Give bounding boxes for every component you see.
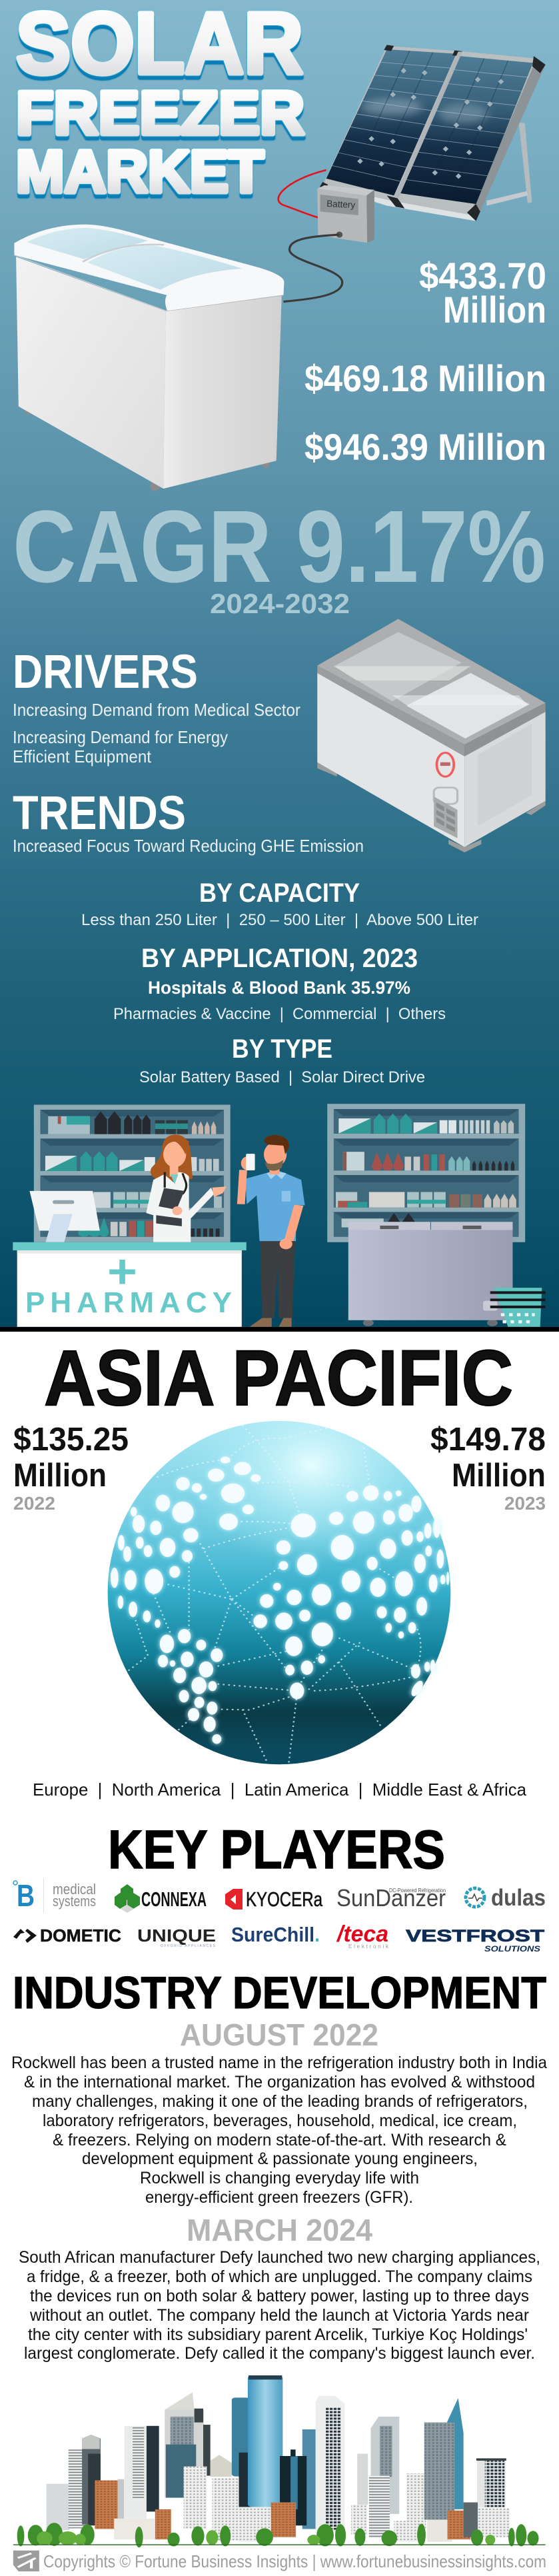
logo: B medical systems: B <box>17 1878 35 1913</box>
logo: SunDanzer: SunDanzer <box>336 1884 446 1912</box>
heading: by application: BY APPLICATION, 2023 <box>141 944 418 973</box>
stat: 2023 value <box>430 1422 546 1514</box>
logo: SureChill: SureChill. <box>231 1923 320 1946</box>
ground line <box>13 2544 546 2545</box>
logo: Connexa: CONNEXA <box>141 1888 207 1911</box>
logo: SunDanzer: DC-Powered Refrigeration <box>389 1888 446 1894</box>
date: August 2022: AUGUST 2022 <box>180 2017 378 2052</box>
drivers list <box>13 700 300 766</box>
trends text: Increased Focus Toward Reducing GHE Emission <box>13 836 364 856</box>
text block: March 2024 development: without an outlet. The company held the launch at Victoria Yards near <box>29 2306 529 2325</box>
text block: March 2024 development <box>19 2248 540 2363</box>
battery label: Battery <box>326 198 356 210</box>
logo: Dometic: DOMETIC <box>40 1926 121 1945</box>
application leading share: Hospitals & Blood Bank 35.97% <box>148 978 410 998</box>
icon: isometric chest freezer <box>317 619 546 852</box>
drivers list: Increasing Demand from Medical Sector <box>13 700 300 720</box>
text block: August 2022 development: & in the international market. The organization has evolved & withstood <box>24 2073 535 2091</box>
logo: B medical systems <box>13 1878 96 1913</box>
heading: key players: KEY PLAYERS <box>108 1820 445 1880</box>
text block: August 2022 development: & freezers. Relying on modern state-of-the-art. With research & <box>53 2131 506 2149</box>
icon: white chest freezer <box>14 225 284 491</box>
title: MARKET <box>16 138 264 205</box>
capacity segments: Less than 250 Liter | 250 – 500 Liter | Above 500 Liter <box>81 911 478 929</box>
logo: Unique: OFFGRID APPLIANCES <box>161 1944 216 1948</box>
date: March 2024: MARCH 2024 <box>187 2213 372 2247</box>
illustration: city skyline <box>13 2375 546 2547</box>
title: FREEZER <box>16 79 304 147</box>
left shelf <box>34 1105 231 1242</box>
text block: August 2022 development: energy-efficient green freezers (GFR). <box>145 2188 413 2207</box>
illustration: pharmacy scene <box>13 1104 546 1327</box>
stat: 2023 value: 2023 <box>504 1493 546 1514</box>
icon: solar panels with battery and cables <box>279 45 546 302</box>
logo: Steca: /teca <box>336 1922 388 1947</box>
logo: Vestfrost: VESTFROST <box>406 1927 544 1945</box>
stat: 2022 value: $135.25 <box>13 1422 129 1458</box>
text block: March 2024 development: the devices run on both solar & battery power, lasting up to three days <box>30 2287 529 2305</box>
text block: August 2022 development: development equipment & passionate young engineers, <box>82 2149 478 2168</box>
application segments: Pharmacies & Vaccine | Commercial | Others <box>113 1005 446 1023</box>
text block: March 2024 development: South African manufacturer Defy launched two new charging appliances, <box>19 2248 540 2267</box>
pharmacist <box>146 1134 227 1242</box>
stat: 2023 value: Million <box>452 1458 546 1494</box>
stat: 2022 value: Million <box>13 1458 107 1494</box>
heading: trends: TRENDS <box>13 787 186 840</box>
text block: March 2024 development: the city center with its subsidiary parent Arcelik, Turkiye Koç Holdings' <box>28 2325 528 2344</box>
chest freezer in pharmacy <box>348 1222 512 1326</box>
text block: August 2022 development: many challenges, making it one of the leading brands of refrigerators, <box>32 2092 528 2111</box>
text block: March 2024 development: largest conglomerate. Defy called it the company's biggest launch ever. <box>24 2344 535 2363</box>
CAGR period: 2024-2032 <box>210 588 350 619</box>
logo: Kyocera: KYOCERa <box>246 1888 323 1911</box>
title <box>16 0 304 205</box>
icon: globe <box>108 1406 450 1764</box>
customer <box>241 1135 305 1327</box>
heading: by capacity: BY CAPACITY <box>199 878 360 908</box>
text block: August 2022 development: laboratory refrigerators, beverages, household, medical, ice cream, <box>43 2111 517 2130</box>
logo: B medical systems: medical <box>53 1881 96 1898</box>
logo: Steca: Elektronik <box>348 1943 389 1949</box>
logo: Vestfrost <box>406 1927 544 1953</box>
stat: market size unit: Million <box>443 289 546 331</box>
trees <box>17 2523 539 2547</box>
text block: August 2022 development <box>11 2053 547 2207</box>
shopping basket <box>483 1288 546 1327</box>
panel: market overview background <box>0 0 559 1328</box>
stat: market size value 1: $433.70 <box>419 255 546 297</box>
text block: August 2022 development: Rockwell has been a trusted name in the refrigeration industry both in India <box>11 2053 547 2072</box>
heading: by type: BY TYPE <box>232 1034 332 1064</box>
monitor <box>29 1191 100 1242</box>
drivers list: Efficient Equipment <box>13 746 152 766</box>
logo: Unique: UNIQUE <box>137 1926 216 1945</box>
heading: Asia Pacific: ASIA PACIFIC <box>44 1334 513 1422</box>
pharmacy counter <box>13 1242 247 1327</box>
stat: 2023 value: $149.78 <box>430 1422 546 1458</box>
right shelf <box>327 1104 525 1242</box>
footer logo <box>13 2551 39 2571</box>
logo: Vestfrost: SOLUTIONS <box>484 1944 540 1953</box>
logo: Dulas <box>466 1885 546 1911</box>
logo: Dulas: dulas <box>491 1885 546 1911</box>
type segments: Solar Battery Based | Solar Direct Drive <box>139 1068 425 1086</box>
heading: drivers: DRIVERS <box>13 646 198 698</box>
logo: Kyocera <box>225 1888 323 1911</box>
stat: 2022 value: 2022 <box>13 1493 55 1514</box>
black divider bar <box>0 1327 559 1332</box>
text block: August 2022 development: Rockwell is changing everyday life with <box>140 2169 419 2187</box>
stat: 2022 value <box>13 1422 129 1514</box>
pharmacy sign text: PHARMACY <box>25 1286 232 1319</box>
logo: Connexa <box>115 1884 207 1913</box>
logo: B medical systems: systems <box>53 1893 96 1910</box>
drivers list: Increasing Demand for Energy <box>13 727 228 747</box>
other regions: Europe | North America | Latin America | Middle East & Africa <box>33 1780 527 1800</box>
text block: March 2024 development: a fridge, & a freezer, both of which are unplugged. The company claims <box>27 2267 532 2286</box>
